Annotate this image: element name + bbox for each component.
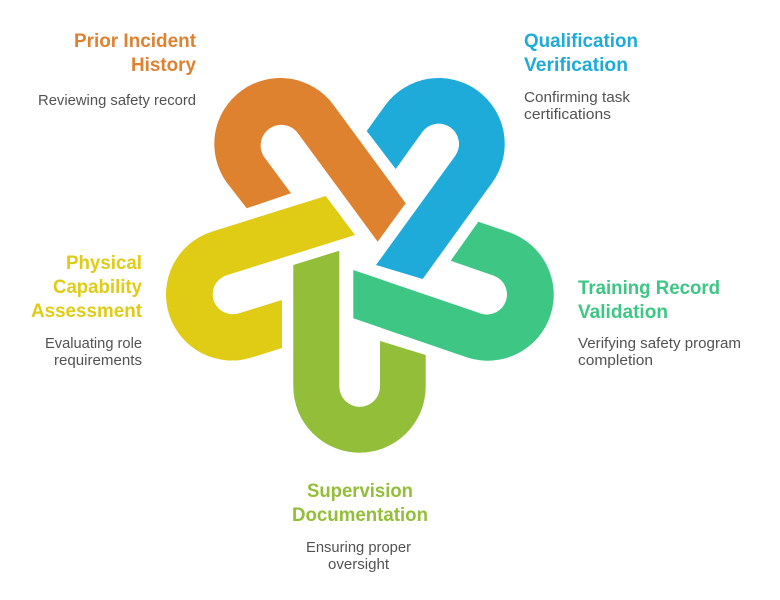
text block: Supervision Documentation xyxy=(292,481,428,573)
description: Physical Capability Assessment: Evaluating role xyxy=(45,335,142,352)
heading: Physical Capability Assessment: Assessment xyxy=(31,301,143,322)
heading: Prior Incident History: History xyxy=(131,55,196,76)
heading: Training Record Validation: Validation xyxy=(578,302,668,323)
heading: Prior Incident History: Prior Incident xyxy=(74,31,197,52)
heading: Physical Capability Assessment xyxy=(31,253,143,322)
heading: Supervision Documentation: Documentation xyxy=(292,505,428,526)
icon: orange link segment xyxy=(214,78,406,242)
icon: yellow link segment xyxy=(166,196,355,361)
description: Qualification Verification: Confirming task xyxy=(524,89,631,106)
icon: olive link segment xyxy=(293,251,426,453)
heading: Supervision Documentation xyxy=(292,481,428,526)
description: Supervision Documentation: oversight xyxy=(328,556,390,573)
text block: Qualification Verification xyxy=(524,31,638,123)
heading: Qualification Verification xyxy=(524,31,638,76)
heading: Training Record Validation xyxy=(578,278,720,323)
description: Physical Capability Assessment: requirements xyxy=(54,352,142,369)
description: Qualification Verification xyxy=(524,89,631,123)
description: Training Record Validation: completion xyxy=(578,352,653,369)
heading: Supervision Documentation: Supervision xyxy=(307,481,413,502)
heading: Prior Incident History xyxy=(74,31,197,76)
heading: Qualification Verification: Verification xyxy=(524,55,628,76)
heading: Training Record Validation: Training Record xyxy=(578,278,720,299)
icon: green link segment xyxy=(353,222,554,361)
description: Supervision Documentation xyxy=(306,539,411,573)
text block: Physical Capability Assessment xyxy=(31,253,143,369)
description: Training Record Validation: Verifying safety program xyxy=(578,335,741,352)
text block: Prior Incident History xyxy=(38,31,197,109)
description: Qualification Verification: certifications xyxy=(524,106,611,123)
heading: Qualification Verification: Qualification xyxy=(524,31,638,52)
heading: Physical Capability Assessment: Capability xyxy=(53,277,142,298)
description: Training Record Validation xyxy=(578,335,741,369)
text block: Training Record Validation xyxy=(578,278,741,369)
icon: blue link segment xyxy=(367,78,505,279)
heading: Physical Capability Assessment: Physical xyxy=(66,253,142,274)
description: Physical Capability Assessment xyxy=(45,335,142,369)
description: Supervision Documentation: Ensuring proper xyxy=(306,539,411,556)
description: Prior Incident History: Reviewing safety record xyxy=(38,92,196,109)
